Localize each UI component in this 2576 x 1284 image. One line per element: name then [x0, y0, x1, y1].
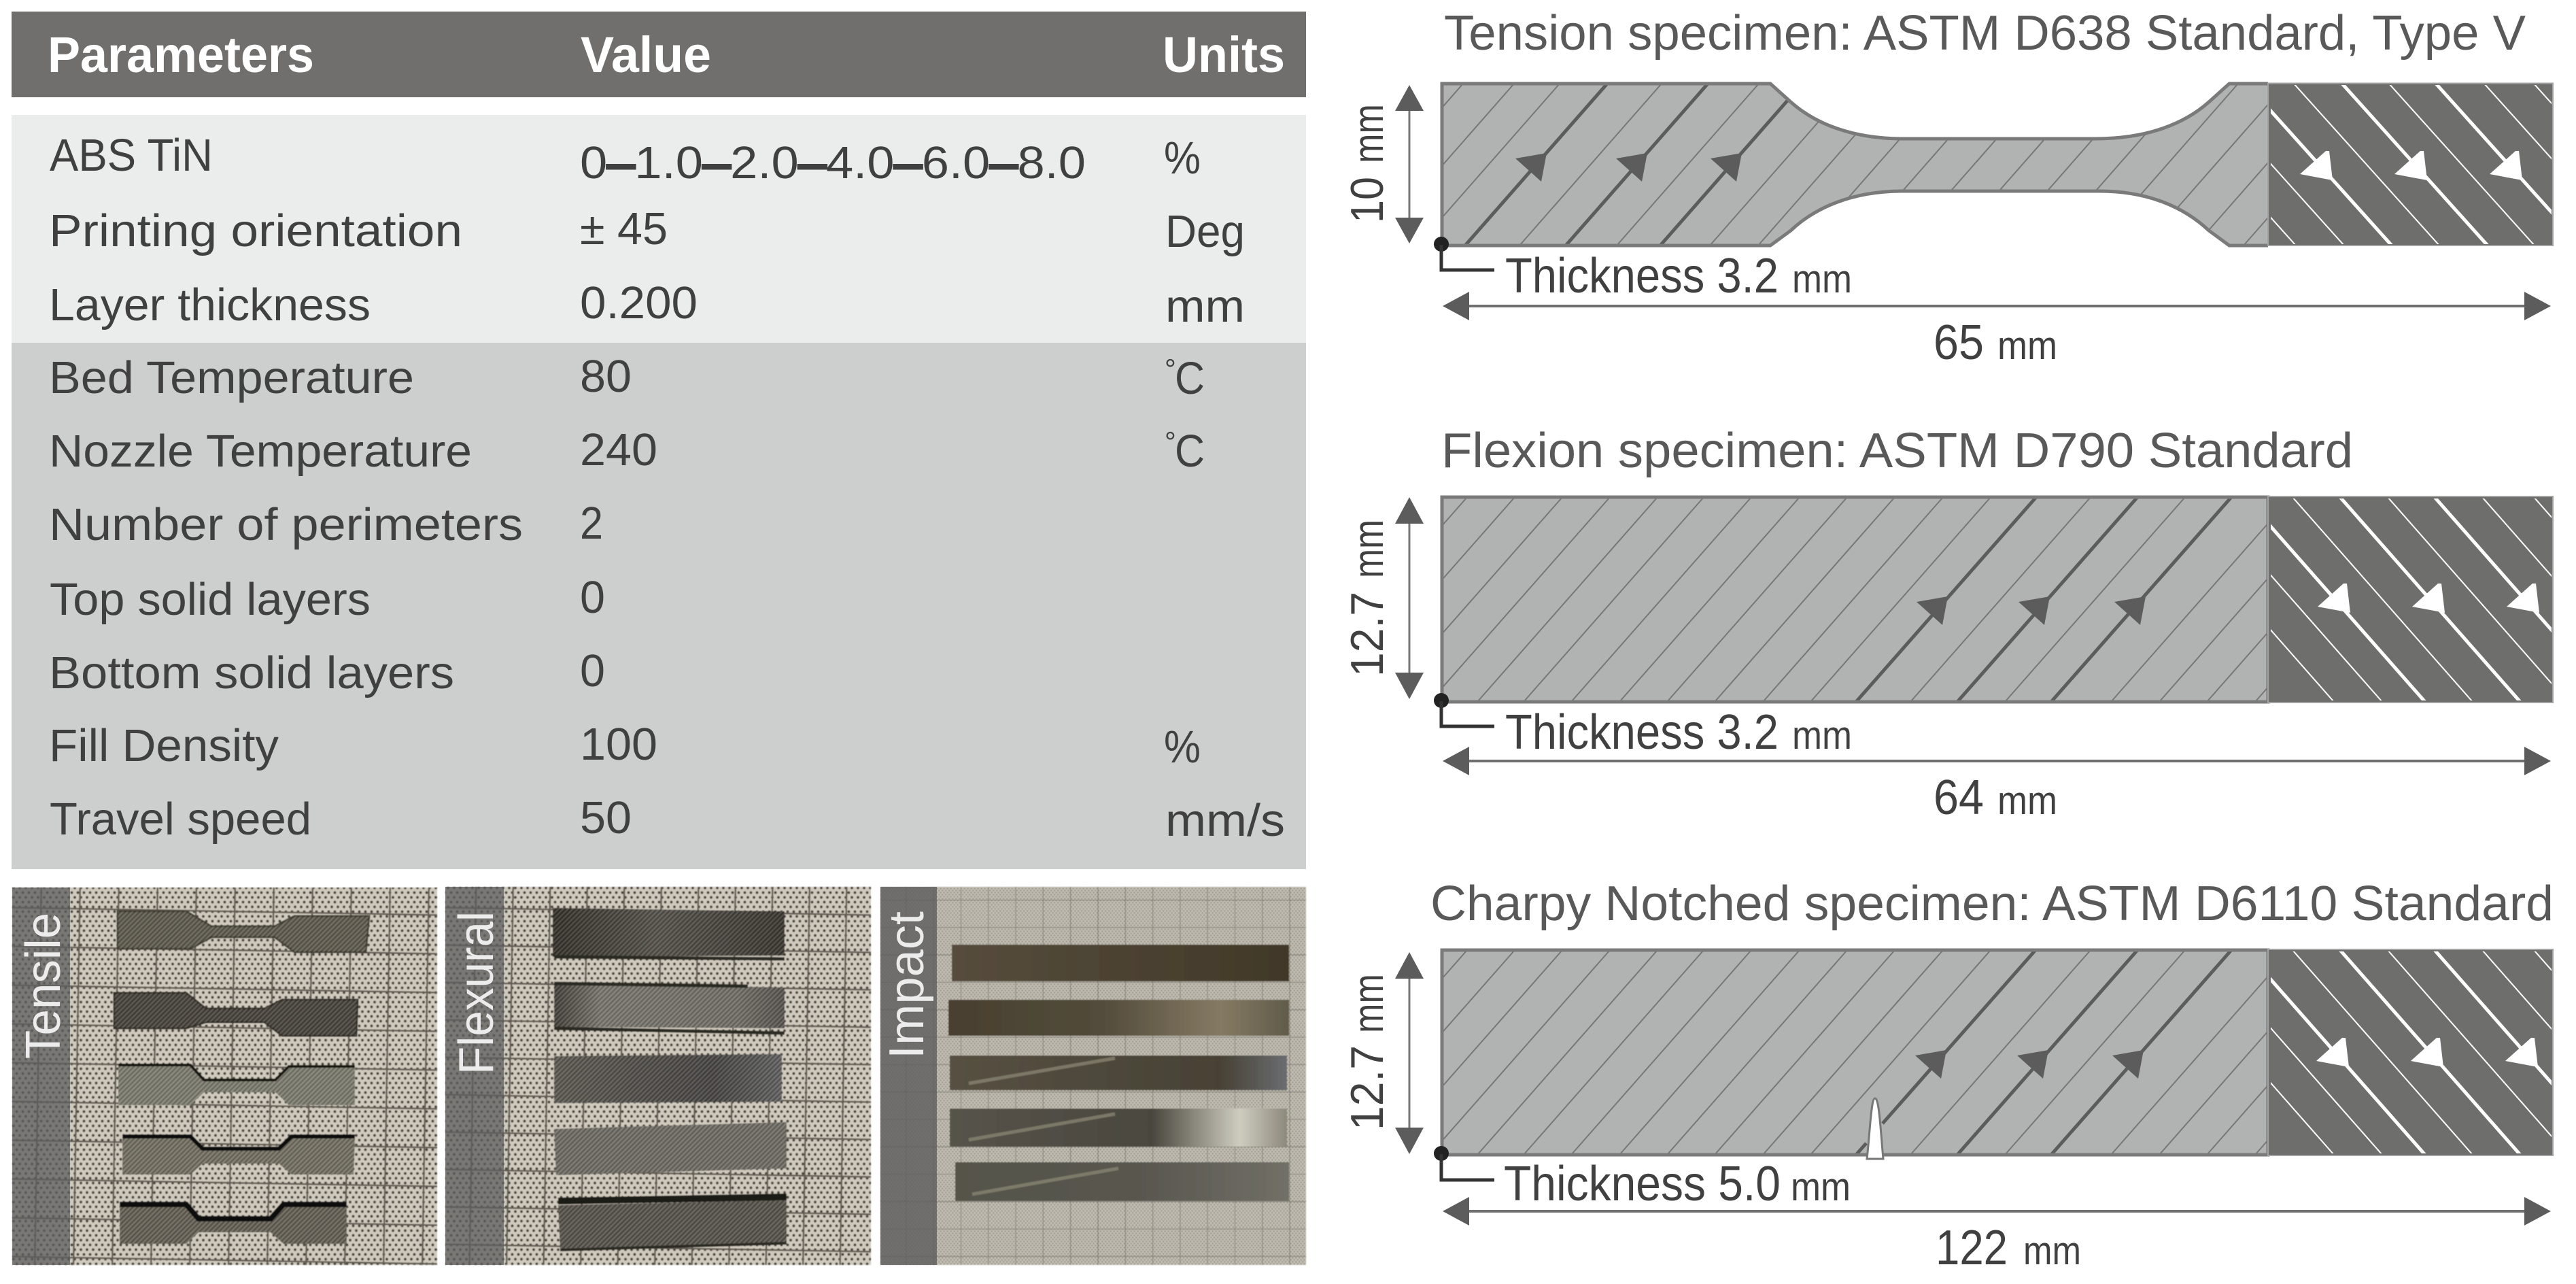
- row: Fill Density: 100: [580, 719, 657, 770]
- thickness callout: 5.0 mm: [1434, 1146, 1851, 1211]
- row: Printing orientation: Deg: [1165, 206, 1245, 257]
- thickness callout: 3.2 mm: Thickness 3.2: [1505, 705, 1779, 760]
- row: Travel speed: [50, 792, 1285, 846]
- dimension: 10 mm height: mm: [1345, 104, 1392, 163]
- notch: [1867, 1098, 1883, 1159]
- flexural specimens: [553, 908, 787, 1250]
- dark part with white hatching: [2267, 949, 2554, 1156]
- table header row: Value: [581, 27, 711, 83]
- thickness callout: 3.2 mm: mm: [1792, 713, 1852, 758]
- strip with Flexural label: [445, 887, 504, 1265]
- diagram: flexion specimen: [1440, 495, 2554, 703]
- row: Top solid layers: 0: [580, 572, 605, 623]
- print-direction arrows, dark: [1515, 153, 1742, 182]
- row: ABS TiN: %: [1164, 133, 1201, 184]
- title: tension specimen: Tension specimen: ASTM D638 Standard, Type V: [1444, 6, 2526, 61]
- row: ABS TiN: 0–1.0–2.0–4.0–6.0–8.0: [580, 137, 1086, 188]
- dimension: 122 mm length: 122: [1936, 1221, 2008, 1275]
- light half of dog-bone with hatching: [1440, 82, 2268, 248]
- table header row: Parameters: [48, 27, 314, 83]
- dimension: 64 mm length: mm: [1997, 779, 2057, 823]
- panel: impact photo: [880, 887, 1306, 1265]
- row: Layer thickness: 0.200: [580, 277, 698, 328]
- light band of table rows: [12, 115, 1306, 343]
- row: Top solid layers: Top solid layers: [50, 574, 371, 625]
- dark part with white hatching: [2267, 496, 2554, 703]
- row: Number of perimeters: Number of perimeters: [49, 499, 523, 550]
- row: Travel speed: Travel speed: [50, 794, 311, 845]
- dimension: 12.7 mm height: 12.7: [1341, 592, 1393, 677]
- thickness callout: 3.2 mm: [1434, 693, 1852, 760]
- row: Nozzle Temperature: °: [1165, 426, 1176, 458]
- row: Nozzle Temperature: Nozzle Temperature: [49, 426, 472, 477]
- row: ABS TiN: ABS TiN: [50, 130, 213, 181]
- panel: tensile photo: [12, 888, 437, 1265]
- row: Printing orientation: [49, 203, 1245, 257]
- strip with Tensile label: Tensile: [16, 913, 71, 1059]
- dimension: 65 mm length: 65: [1934, 316, 1984, 370]
- dimension: 12.7 mm height: mm: [1345, 974, 1392, 1033]
- row: Printing orientation: ± 45: [580, 203, 668, 254]
- print-direction arrows, dark: [1915, 1050, 2144, 1079]
- row: Printing orientation: Printing orientation: [49, 205, 462, 256]
- row: Layer thickness: [49, 277, 1245, 332]
- dimension: 10 mm height: 10: [1341, 177, 1393, 223]
- dimension: 12.7 mm height: [1341, 497, 1424, 699]
- diagram: Charpy notched specimen: [1440, 948, 2554, 1160]
- row: Bed Temperature: C: [1175, 353, 1205, 404]
- title: Charpy notched specimen: Charpy Notched specimen: ASTM D6110 Standard: [1430, 877, 2554, 931]
- panel: parameter table: [12, 12, 1306, 869]
- strip with Impact label: Impact: [880, 911, 934, 1059]
- diagram: tension specimen: [1321, 83, 2576, 246]
- row: Nozzle Temperature: C: [1175, 426, 1205, 477]
- light part with hatching: [1440, 495, 2269, 703]
- row: Fill Density: [49, 719, 1201, 773]
- row: Bottom solid layers: Bottom solid layers: [49, 647, 454, 698]
- row: Bed Temperature: °: [1165, 353, 1176, 385]
- print-direction arrows, dark: [1917, 596, 2146, 625]
- table header row: Units: [1163, 27, 1285, 83]
- row: Fill Density: %: [1164, 722, 1201, 773]
- row: Travel speed: 50: [580, 792, 632, 843]
- dimension: 122 mm length: mm: [2023, 1229, 2081, 1273]
- table header row: [12, 12, 1306, 97]
- row: Nozzle Temperature: 240: [580, 424, 657, 475]
- row: ABS TiN: [50, 130, 1201, 188]
- dimension: 65 mm length: mm: [1997, 324, 2057, 368]
- light part with hatching: [1440, 948, 2269, 1156]
- thickness callout: 3.2 mm: Thickness 3.2: [1505, 249, 1779, 303]
- strip with Flexural label: Flexural: [449, 911, 504, 1075]
- row: Top solid layers: [50, 572, 605, 625]
- tensile specimens: [114, 911, 369, 1244]
- row: Bed Temperature: [49, 351, 1205, 404]
- dimension: 12.7 mm height: mm: [1345, 520, 1392, 578]
- row: Travel speed: mm/s: [1165, 795, 1285, 846]
- row: Bottom solid layers: [49, 645, 605, 698]
- strip with Impact label: [880, 887, 937, 1265]
- dimension: 122 mm length: [1443, 1197, 2551, 1275]
- strip with Tensile label: [12, 888, 71, 1265]
- impact specimens: [948, 945, 1289, 1201]
- row: Layer thickness: Layer thickness: [49, 280, 371, 331]
- row: Bed Temperature: Bed Temperature: [49, 352, 414, 403]
- panel: flexural photo: [445, 887, 871, 1265]
- row: Nozzle Temperature: [49, 424, 1205, 477]
- dimension: 10 mm height: [1341, 85, 1424, 243]
- dimension: 65 mm length: [1443, 292, 2551, 370]
- dark half with white hatching: [2267, 83, 2554, 246]
- thickness callout: 3.2 mm: [1434, 237, 1852, 303]
- grey band of table rows: [12, 343, 1306, 869]
- dimension: 12.7 mm height: [1341, 952, 1424, 1154]
- dimension: 12.7 mm height: 12.7: [1341, 1045, 1393, 1130]
- row: Bed Temperature: 80: [580, 351, 632, 402]
- row: Bottom solid layers: 0: [580, 645, 605, 696]
- dimension: 64 mm length: 64: [1934, 771, 1984, 825]
- row: Fill Density: Fill Density: [49, 720, 279, 771]
- thickness callout: 3.2 mm: mm: [1792, 257, 1852, 301]
- title: flexion specimen: Flexion specimen: ASTM D790 Standard: [1441, 424, 2353, 478]
- row: Number of perimeters: 2: [580, 498, 603, 549]
- thickness callout: 5.0 mm: mm: [1791, 1165, 1851, 1209]
- dimension: 64 mm length: [1443, 747, 2551, 825]
- thickness callout: 5.0 mm: Thickness 5.0: [1504, 1157, 1781, 1211]
- row: Layer thickness: mm: [1165, 281, 1245, 332]
